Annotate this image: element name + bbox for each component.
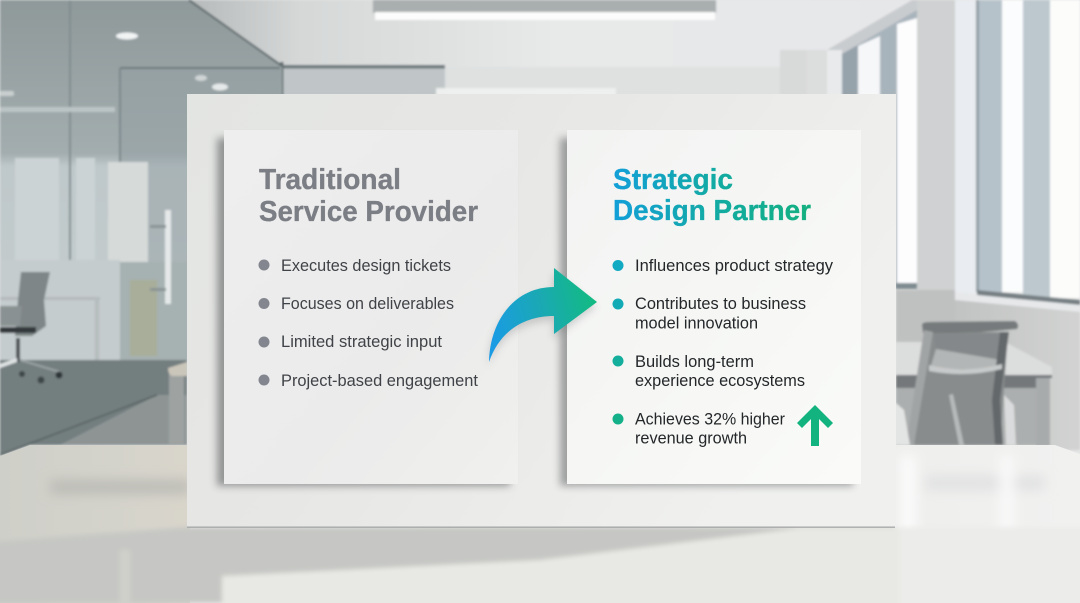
table reflection below board [0,527,1080,603]
glass wall [0,0,282,450]
list: traditional traits: Project-based engagement [281,371,478,390]
list: strategic traits [612,256,834,448]
list: strategic traits: experience ecosystems [635,371,805,390]
floor behind glass [0,360,187,456]
ceiling lights [116,32,138,40]
icon: green up arrow [797,405,833,446]
list: traditional traits: Focuses on deliverables [281,294,454,313]
table top [0,445,1080,603]
list: traditional traits [258,256,478,390]
heading: traditional service provider: Traditional [259,164,401,196]
panel: traditional service provider [217,130,518,486]
right wall [805,50,917,110]
heading: strategic design partner [613,164,811,227]
list: strategic traits: Influences product strategy [635,256,834,275]
list: traditional traits: Limited strategic input [281,332,442,351]
ceiling light fixture [373,0,716,96]
panel: strategic design partner [560,130,861,486]
list: strategic traits: Achieves 32% higher [635,410,785,428]
list: traditional traits: Executes design tickets [281,256,451,275]
heading: traditional service provider: Service Provider [259,196,478,228]
chair [908,332,1008,445]
stool [169,372,184,444]
column and right window [917,0,955,300]
heading: strategic design partner: Strategic [613,164,733,196]
desk [896,342,1052,375]
list: strategic traits: revenue growth [635,428,747,448]
heading: strategic design partner: Design Partner [613,195,811,227]
arrow: transition from traditional to strategic [488,268,597,367]
list: strategic traits: Builds long-term [635,352,754,371]
heading: traditional service provider [259,164,478,228]
window left [842,10,917,288]
ceiling [190,0,930,70]
board [187,94,896,528]
list: strategic traits: Contributes to business [635,294,806,313]
chair behind glass [0,297,100,300]
list: strategic traits: model innovation [635,314,758,332]
